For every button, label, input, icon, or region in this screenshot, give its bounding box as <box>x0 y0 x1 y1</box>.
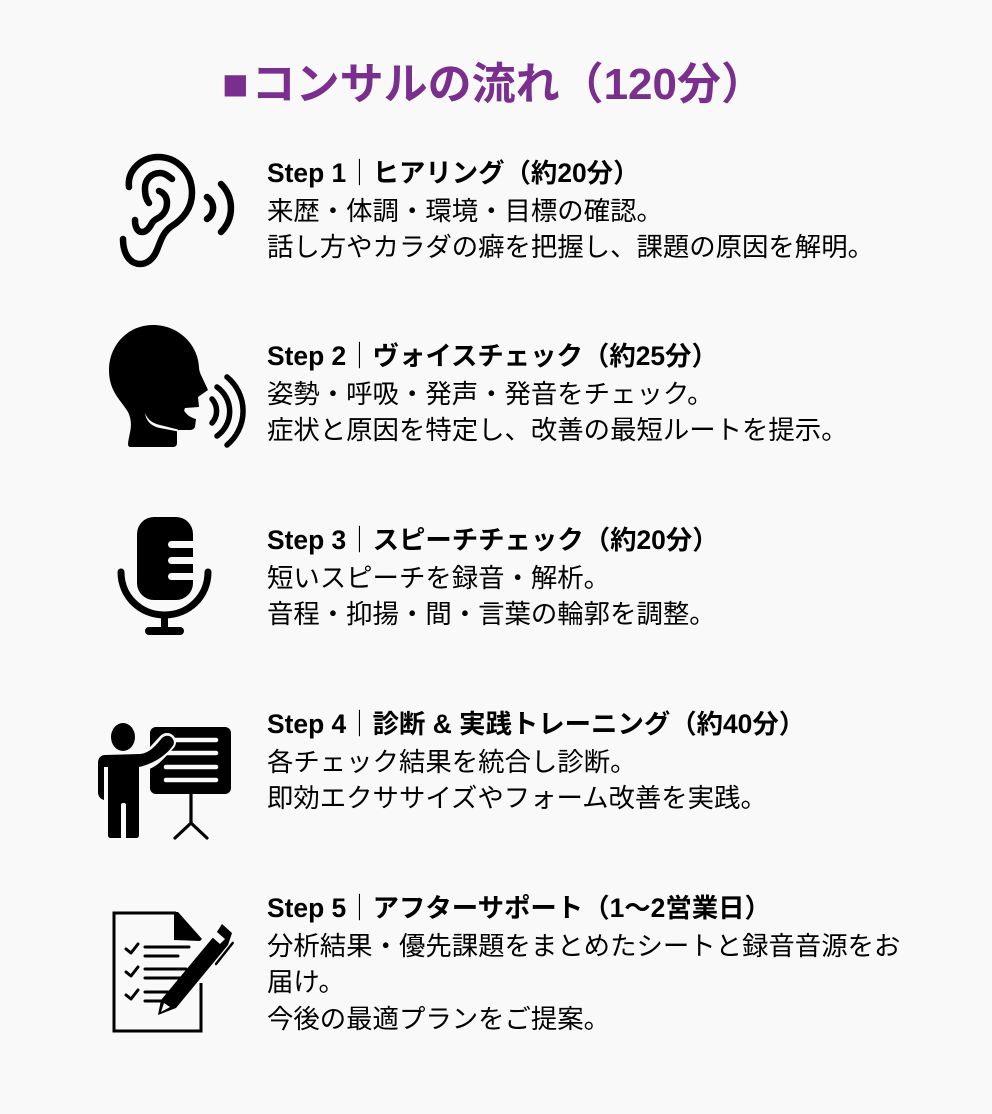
icon: speaking head <box>109 325 246 448</box>
step 4 text: 各チェック結果を統合し診断。 <box>267 747 636 777</box>
step 2 text: Step 2｜ヴォイスチェック（約25分） <box>267 341 718 371</box>
step 1 text <box>267 158 874 262</box>
step 4 text: 即効エクササイズやフォーム改善を実践。 <box>267 783 767 813</box>
title: ■コンサルの流れ（120分） <box>222 60 765 109</box>
step 1 text: 話し方やカラダの癖を把握し、課題の原因を解明。 <box>267 232 874 262</box>
step 5 text: Step 5｜アフターサポート（1～2営業日） <box>267 893 771 923</box>
step 4 text: Step 4｜診断 & 実践トレーニング（約40分） <box>267 709 805 739</box>
step 4 text <box>267 709 805 813</box>
step 3 text: 音程・抑揚・間・言葉の輪郭を調整。 <box>267 599 716 629</box>
step 1 text: Step 1｜ヒアリング（約20分） <box>267 158 639 188</box>
step 2 text: 姿勢・呼吸・発声・発音をチェック。 <box>267 379 714 409</box>
step 1 text: 来歴・体調・環境・目標の確認。 <box>267 196 663 226</box>
step 2 text: 症状と原因を特定し、改善の最短ルートを提示。 <box>267 415 848 445</box>
step 2 text <box>267 341 848 445</box>
step 3 text: 短いスピーチを録音・解析。 <box>267 563 610 593</box>
icon: presenter at board <box>98 723 231 840</box>
icon: ear with sound waves <box>120 154 234 268</box>
icon: microphone <box>118 517 212 635</box>
icon: checklist document and pen <box>112 912 234 1032</box>
step 5 text: 届け。 <box>267 967 345 997</box>
step 3 text: Step 3｜スピーチチェック（約20分） <box>267 525 719 555</box>
step 5 text: 今後の最適プランをご提案。 <box>267 1004 610 1034</box>
step 5 text: 分析結果・優先課題をまとめたシートと録音音源をお <box>267 931 900 961</box>
step 5 text <box>267 893 900 1034</box>
step 3 text <box>267 525 719 629</box>
